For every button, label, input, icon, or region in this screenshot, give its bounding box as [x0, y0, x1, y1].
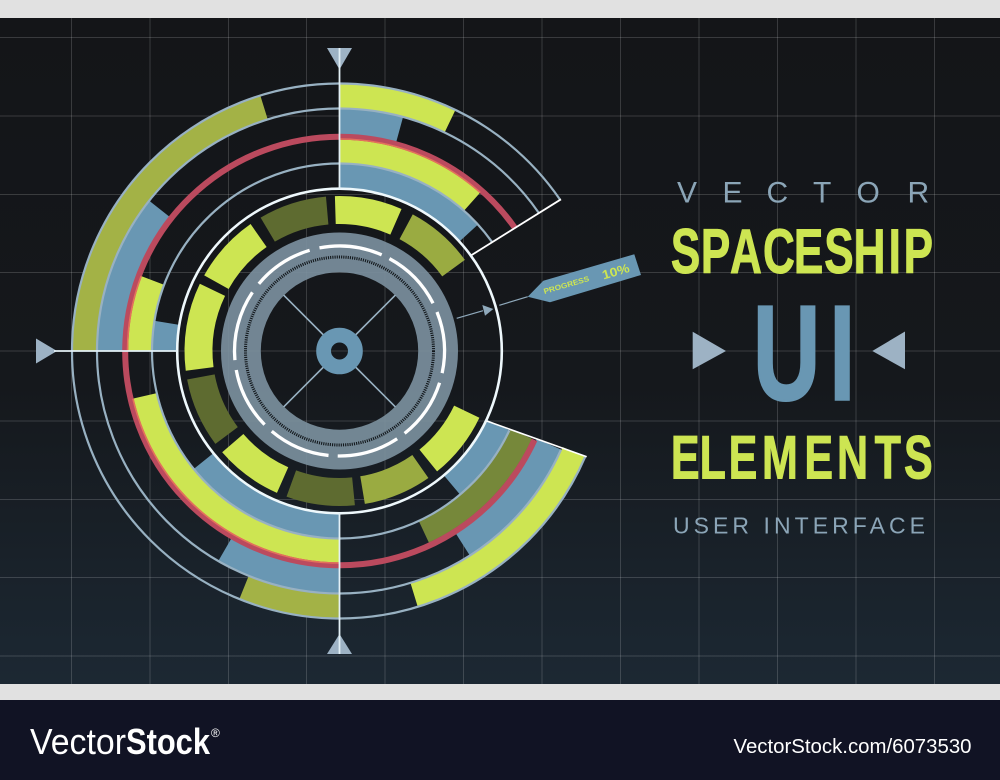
heading: ELEMENTS: ELEMENTS — [671, 424, 933, 493]
ring: outermost yellow and olive bands — [4, 16, 675, 686]
top light band — [0, 0, 1000, 18]
red progress arc — [56, 67, 623, 635]
subheading: USER INTERFACE: USER INTERFACE — [673, 512, 925, 538]
white ring — [177, 189, 502, 513]
crosshair line left — [54, 350, 177, 352]
footer bar — [0, 700, 1000, 780]
crosshair line top — [338, 48, 340, 189]
ring: outer blue bands — [37, 49, 642, 653]
progress label: PROGRESS — [543, 274, 590, 296]
footer logo: VectorStock: Vector — [30, 721, 126, 762]
closing line top right — [472, 199, 561, 255]
crosshair line bottom — [338, 513, 340, 654]
ring outlines — [0, 0, 691, 702]
progress tag shape — [528, 254, 641, 302]
icon: left pointer triangle — [693, 332, 726, 369]
segmented gauge ring — [142, 154, 537, 548]
arrow into dial — [457, 305, 493, 318]
closing line bottom right — [487, 421, 587, 457]
progress value: 10% — [600, 261, 631, 282]
heading: VECTOR: VECTOR — [677, 177, 929, 210]
icon: bottom triangle marker — [327, 634, 352, 654]
ring: yellow and olive bands — [75, 86, 604, 616]
heading: UI: UI — [753, 277, 855, 429]
orange highlight edges on red arc — [128, 139, 552, 563]
footer logo: VectorStock: ® — [211, 726, 220, 740]
bottom light band — [0, 684, 1000, 700]
icon: top triangle marker — [327, 48, 352, 70]
heading: SPACESHIP: SPACESHIP — [671, 216, 933, 287]
icon: left triangle marker — [36, 338, 57, 364]
ring: inner blue bands — [107, 118, 572, 584]
icon: right pointer triangle — [872, 332, 905, 369]
cross spokes — [284, 295, 395, 407]
footer logo: VectorStock: Stock — [126, 721, 211, 762]
footer logo: VectorStock — [30, 721, 220, 762]
footer image id: VectorStock.com/6073530 — [734, 736, 972, 758]
gray core ring — [241, 252, 438, 450]
tick mark ring — [246, 257, 434, 445]
radial spaceship dial chart — [0, 0, 691, 702]
callout: progress 10% — [457, 254, 641, 318]
tag leader line — [499, 297, 528, 305]
center hub — [324, 335, 355, 367]
white dashed ring — [191, 203, 488, 499]
